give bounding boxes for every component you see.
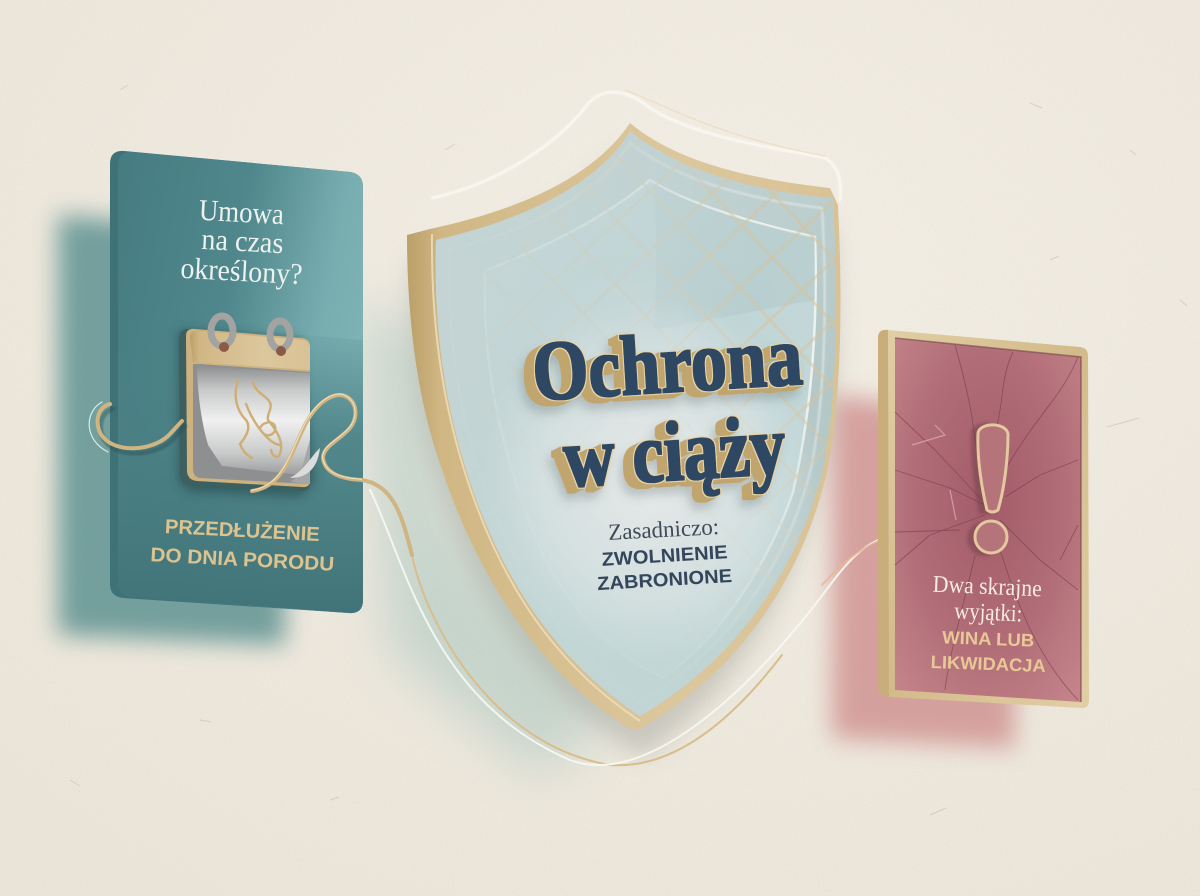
- icon: pregnant silhouette: [236, 381, 281, 458]
- connector: gold wire around calendar: [89, 394, 412, 555]
- label: extension until birth: DO DNIA PORODU: [150, 544, 335, 576]
- title: [530, 309, 805, 506]
- label: extension until birth: [150, 515, 335, 576]
- question text: [180, 194, 303, 291]
- shield: glass rim line: [450, 143, 825, 703]
- label: extension until birth: PRZEDŁUŻENIE: [164, 515, 320, 546]
- question text: Umowa: [198, 194, 285, 231]
- label: fault or liquidation: LIKWIDACJA: [930, 652, 1046, 676]
- shadow: pink card: [832, 395, 1015, 748]
- shield: gold frame: [407, 123, 841, 730]
- shadow: teal card: [58, 215, 610, 775]
- title: Ochrona: [530, 309, 805, 419]
- label: dismissal forbidden: ZABRONIONE: [597, 566, 733, 595]
- question text: na czas: [201, 223, 284, 260]
- panel: pink warning card: [878, 330, 1089, 708]
- shield: lattice: [436, 131, 836, 716]
- text: two exceptions: [932, 572, 1042, 627]
- text: two exceptions: wyjątki:: [954, 599, 1023, 627]
- question text: określony?: [180, 252, 303, 291]
- label: fault or liquidation: WINA LUB: [942, 627, 1035, 651]
- icon: calendar: [178, 316, 320, 497]
- subtitle: Zasadniczo:: [608, 514, 720, 545]
- halo lines: white and gold arcs: [370, 90, 878, 765]
- icon: calendar rings: [211, 316, 290, 356]
- title: w ciąży: [561, 398, 788, 506]
- shield: glass layer: [436, 131, 836, 716]
- label: dismissal forbidden: ZWOLNIENIE: [601, 542, 728, 571]
- shield: inner gold line: [432, 234, 640, 721]
- icon: exclamation mark: [967, 423, 1008, 556]
- shadow: shield: [411, 152, 836, 757]
- label: fault or liquidation: [930, 627, 1046, 676]
- panel: glass shield: [400, 120, 850, 740]
- text: two exceptions: Dwa skrajne: [932, 572, 1042, 602]
- shield: inner panel: [485, 180, 816, 677]
- shield: darker glass facet: [654, 184, 815, 330]
- panel: teal contract card: [110, 151, 363, 613]
- label: dismissal forbidden: [597, 542, 733, 595]
- cracks: [895, 345, 1078, 700]
